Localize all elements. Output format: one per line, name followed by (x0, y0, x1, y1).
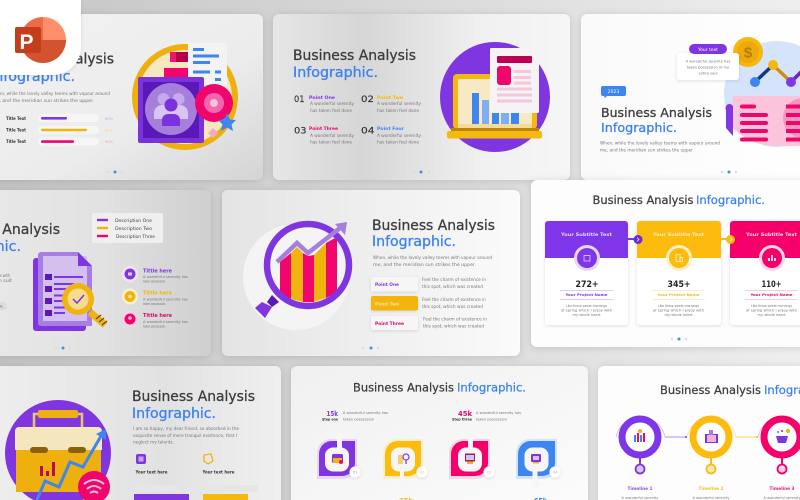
stat: step three (452, 410, 521, 422)
page indicator (107, 170, 123, 174)
text block: slide 5 description (373, 255, 492, 267)
text block: slide 7 description (133, 426, 239, 444)
bar chart: title text rows: Title Text (6, 139, 26, 144)
card: pink: my whole heart (758, 313, 786, 317)
column: text one: Your text here (135, 470, 168, 474)
text block: slide 1 description (0, 91, 110, 103)
heading: slide 7 (132, 389, 255, 422)
card: pink: of spring which I enjoy with (746, 308, 797, 312)
heading: slide 2: Infographic. (293, 65, 378, 81)
card: yellow: Like these sweet mornings (658, 304, 699, 308)
bar chart: title text rows: 60% (105, 117, 114, 121)
bar chart: title text rows: 90% (105, 140, 114, 144)
card: pink: Your Project Name (749, 292, 793, 297)
list: icon items: A wonderful serenity has (143, 298, 188, 302)
legend: Description Two (115, 226, 152, 231)
card: yellow: my whole heart (664, 313, 693, 317)
illustration: magnifier with bars (243, 222, 349, 330)
column: text one (134, 454, 189, 500)
panel: slide 4 checklist (0, 190, 211, 356)
card: pink (730, 221, 800, 325)
card: purple: my whole heart (572, 313, 601, 317)
step 02 (383, 439, 428, 489)
list: icon items (122, 266, 188, 328)
panel: slide 6 subtitle cards (531, 180, 800, 347)
point list: Point Three (309, 126, 338, 132)
panel: slide 8 four steps (291, 366, 588, 500)
point list: has taken feel done (377, 108, 419, 113)
heading: slide 8: Infographic. (457, 382, 526, 394)
step 01: 01 (353, 470, 357, 474)
list: point rows: Point One (375, 282, 399, 288)
callout: your text (677, 44, 739, 80)
list: point rows: Feel the charm of existence in (422, 277, 486, 282)
point list: has taken feel done (310, 140, 352, 144)
text block: slide 3 description: me, and the meridian sun strikes the upper. (600, 148, 694, 152)
text block: slide 5 description: me, and the meridian sun strikes the upper. (373, 262, 476, 267)
callout: your text: taken possession of my (687, 66, 730, 70)
heading: slide 7: Infographic. (132, 406, 216, 422)
step 02: 02 (420, 470, 424, 474)
timeline step 2: Timeline 2 (698, 486, 724, 492)
list: point rows: this spot, which was created (422, 304, 483, 309)
bar chart: title text rows: Title Text (6, 116, 26, 121)
card: purple: Your Project Name (564, 292, 608, 297)
card: purple: of spring which I enjoy with (561, 308, 612, 312)
list: point rows: Point Two (375, 302, 399, 308)
PowerPoint badge (0, 0, 81, 75)
point list: Point Four (377, 126, 405, 132)
heading: slide 8 (353, 382, 526, 394)
list: point rows: Feel the charm of existence in (423, 316, 487, 322)
point list: Point Two (377, 95, 403, 101)
bar chart: title text rows (6, 114, 114, 146)
badge: year 2023 (601, 86, 626, 98)
legend (92, 213, 163, 243)
list: icon items: Tittle here (143, 313, 172, 319)
icon: PowerPoint logo: P (20, 31, 34, 54)
point list: 03 (294, 126, 306, 136)
callout: your text: A wonderful serenity has (686, 60, 730, 64)
point list: A wonderful serenity (377, 133, 422, 138)
stat: step three: taken possession (476, 418, 507, 422)
illustration: checklist with magnifier (33, 252, 107, 331)
text block: slide 7 description: I am so happy, my dear friend, so absorbed in the (133, 426, 239, 431)
heading: slide 2: Business Analysis (293, 48, 416, 64)
stat: step one (322, 410, 388, 422)
panel: slide 1 progress bars (0, 14, 263, 180)
stat: step three: Step three (452, 418, 473, 422)
heading: slide 3 (601, 105, 712, 135)
heading: slide 6 (592, 194, 765, 207)
text block: slide 3 description (600, 140, 720, 152)
page indicator (362, 346, 379, 350)
card: pink: 110+ (762, 280, 782, 290)
point list: Point One (309, 95, 335, 101)
card: purple (545, 221, 628, 325)
point list: 04 (361, 126, 374, 136)
callout: your text: Your text (697, 47, 718, 53)
list: point rows: this spot, which was created (423, 324, 484, 328)
page indicator (671, 338, 687, 340)
stat: step one: Step one (322, 418, 339, 422)
stat: step one: taken possession (343, 418, 374, 422)
card: purple: Like these sweet mornings (566, 304, 607, 308)
panel: slide 3 year intro (581, 14, 800, 180)
step 04: 04 (553, 470, 558, 474)
illustration: briefcase with growth arrow (5, 400, 111, 500)
heading: slide 8: Business Analysis (353, 382, 454, 394)
list: point rows: this spot, which was created (422, 284, 483, 289)
point list: A wonderful serenity (310, 101, 355, 106)
point list: 01 (294, 95, 304, 105)
heading: slide 9: Business Analysis (660, 384, 761, 397)
card: yellow: of spring which I enjoy with (653, 308, 704, 312)
heading: slide 5: Business Analysis (372, 218, 495, 234)
panel: slide 9 timeline (598, 366, 800, 500)
text block: slide 7 description: exquisite sense of mere tranquil existence, that I (133, 433, 237, 438)
panel: slide 5 magnifier chart (222, 190, 520, 356)
list: point rows: Feel the charm of existence in (422, 297, 486, 302)
card: pink: Your Subtitle Text (745, 232, 798, 238)
card: yellow: Your Project Name (656, 292, 700, 297)
list: icon items: Tittle here (143, 290, 172, 296)
illustration: book and growth chart (724, 37, 800, 147)
column: text two: Your text here (202, 470, 235, 474)
panel: slide 2 four points (273, 14, 570, 180)
heading: slide 5 (372, 218, 495, 250)
text block: slide 7 description: neglect my talents. (133, 440, 174, 444)
card: yellow: 345+ (668, 280, 690, 290)
illustration: audience analysis (135, 43, 236, 147)
timeline step 1: Timeline 1 (628, 486, 652, 492)
bar chart: title text rows: Title Text (6, 128, 26, 132)
heading: slide 7: Business Analysis (132, 389, 255, 405)
card: yellow: Your Subtitle Text (652, 232, 705, 238)
point list: A wonderful serenity (310, 133, 355, 138)
callout: your text: entire soul (698, 72, 718, 76)
step 01 (317, 430, 360, 479)
heading: slide 6: Infographic. (696, 194, 765, 207)
stat: step one: 15k (326, 410, 338, 418)
heading: slide 4 (0, 222, 60, 255)
timeline step 3 (758, 417, 800, 500)
list: icon items: taken possession. (143, 280, 166, 284)
step 03: 03 (487, 470, 491, 474)
card: pink: Like these sweet mornings (751, 304, 792, 308)
text block: slide 3 description: When, while the lovely valley teems with vapour around (600, 140, 720, 146)
timeline step 3: A wonderful serenity (764, 496, 800, 500)
card: yellow (637, 221, 721, 325)
text block: slide 4 left fragments (0, 273, 12, 310)
timeline step 1: A wonderful serenity (622, 496, 659, 500)
point list: 02 (361, 95, 374, 105)
legend: Description Three (116, 234, 155, 239)
list: point rows: Point Three (375, 321, 404, 327)
list: icon items: Tittle here (143, 268, 172, 274)
heading: slide 3: Business Analysis (601, 105, 712, 120)
heading: slide 5: Infographic. (372, 234, 456, 250)
page indicator (413, 170, 430, 174)
heading: slide 6: Business Analysis (592, 194, 694, 207)
arrow: purple connector (628, 235, 642, 244)
timeline step 1 (616, 417, 687, 500)
list: icon items: taken possession. (143, 324, 166, 328)
timeline step 2 (687, 417, 758, 500)
step 03 (449, 430, 494, 479)
point list: has taken feel done (310, 108, 352, 113)
page indicator (55, 346, 71, 350)
column: text two (202, 454, 258, 500)
illustration: book and growth chart: $ (744, 44, 753, 62)
list: point rows (371, 277, 487, 330)
point list: has taken feel done (377, 140, 419, 144)
legend: Description One (115, 218, 152, 223)
card: purple: Your Subtitle Text (560, 232, 613, 238)
badge: year 2023: 2023 (608, 89, 619, 95)
stat: step three: 45k (458, 410, 472, 418)
list: icon items: A wonderful serenity has (143, 320, 188, 324)
list: icon items: taken possession. (143, 302, 166, 306)
heading: slide 3: Infographic. (601, 120, 677, 135)
point list: A wonderful serenity (377, 101, 422, 106)
list: icon items: A wonderful serenity has (143, 275, 188, 279)
page indicator (721, 170, 737, 174)
illustration: laptop report (440, 42, 550, 152)
bar chart: title text rows: 80% (105, 128, 114, 132)
text block: slide 5 description: When, while the lovely valley teems with vapour around (373, 255, 492, 260)
point list (294, 95, 422, 144)
timeline step 2: A wonderful serenity (692, 496, 730, 500)
stat: step three: A wonderful serenity has (476, 411, 521, 415)
heading: slide 2 (293, 48, 416, 81)
step 04 (516, 439, 560, 489)
panel: slide 7 briefcase (0, 366, 281, 500)
heading: slide 1 (0, 52, 114, 85)
arrow: yellow connector (721, 235, 735, 244)
card: purple: 272+ (576, 280, 598, 290)
timeline step 3: Timeline 3 (770, 486, 794, 492)
stat: step one: A wonderful serenity has (343, 411, 388, 415)
